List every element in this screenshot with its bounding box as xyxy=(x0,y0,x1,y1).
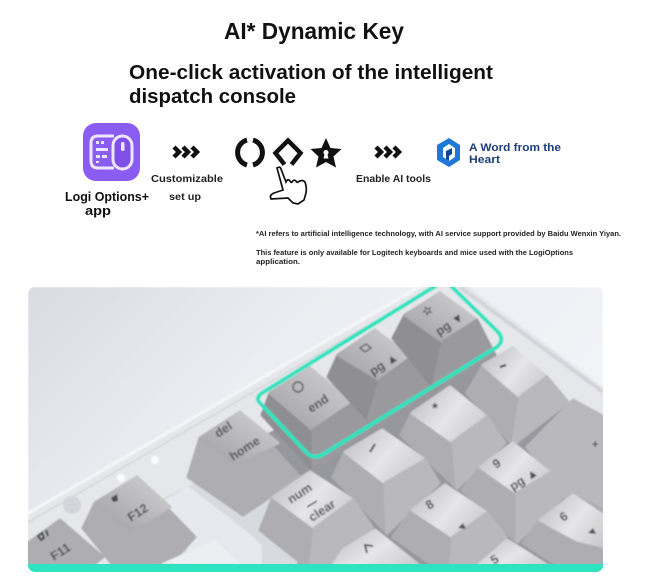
footnote xyxy=(256,231,621,266)
key: num clear: num xyxy=(285,480,315,507)
label: logo wordmark xyxy=(469,142,561,166)
label: Enable AI tools: Enable AI tools xyxy=(356,173,431,185)
icon: diamond key xyxy=(276,140,300,164)
key: minus xyxy=(467,348,568,445)
key: del home: home xyxy=(227,434,263,464)
icon: Logi Options+ app xyxy=(83,123,140,181)
key: 5: 5 xyxy=(488,552,502,568)
key: slash xyxy=(333,430,439,533)
keyboard photo xyxy=(20,275,610,579)
key: F12 xyxy=(83,477,195,570)
key: page down: pg ▼ xyxy=(433,310,467,339)
key: 9 page up xyxy=(462,443,570,542)
highlight: AI key outline xyxy=(258,285,501,457)
key: 5 xyxy=(477,538,550,564)
teal bottom bar xyxy=(28,564,603,572)
subtitle: dispatch console xyxy=(129,86,296,108)
key: num clear: clear xyxy=(306,497,338,525)
key: 9 page up: pg ▲ xyxy=(507,465,541,494)
key: num clear xyxy=(260,472,372,570)
key: 6 xyxy=(522,494,603,564)
footnote: This feature is only available for Logitech keyboards and mice used with the LogiOptions xyxy=(256,250,573,257)
keyboard case xyxy=(28,287,603,564)
footnote: *AI refers to artificial intelligence technology, with AI service support provided by Baidu Wenxin Yiyan. xyxy=(256,231,621,238)
key: plus: + xyxy=(592,439,598,451)
key: page down: ☆ xyxy=(419,302,436,320)
label: Logi Options+ app: Logi Options+ xyxy=(65,190,149,204)
footnote: application. xyxy=(256,259,300,266)
label: logo wordmark: A Word from the xyxy=(469,142,561,154)
key: page up xyxy=(326,328,414,419)
key well shadows xyxy=(164,484,298,564)
icon: blue hexagon xyxy=(437,138,460,167)
subtitle: One-click activation of the intelligent xyxy=(129,62,493,84)
key: 6: 6 xyxy=(557,509,571,525)
key: 8 xyxy=(393,485,506,570)
icon: three AI key symbols with hand xyxy=(238,138,342,204)
key: 9 page up: 9 xyxy=(490,456,504,472)
label: Logi Options+ app xyxy=(65,190,149,218)
icon: circle key xyxy=(238,140,262,165)
label: Logi Options+ app: app xyxy=(85,204,111,218)
logo: A Word from the Heart xyxy=(437,138,561,167)
label: Customizable set up xyxy=(151,173,223,203)
label: logo wordmark: Heart xyxy=(469,154,500,166)
key: F12: F12 xyxy=(125,501,151,525)
key: end: end xyxy=(305,392,331,416)
key: asterisk xyxy=(401,387,505,488)
key: end xyxy=(260,366,350,468)
key: F11 xyxy=(28,520,103,566)
title: AI* Dynamic Key xyxy=(224,18,404,44)
key: lower white xyxy=(160,552,193,564)
key: F11: F11 xyxy=(48,540,73,564)
key: 7 xyxy=(332,528,420,564)
key: page down xyxy=(393,293,495,387)
key: plus xyxy=(525,398,603,508)
key: asterisk: * xyxy=(432,400,438,417)
icon: pointing hand xyxy=(270,167,306,204)
step: Logi Options+ app xyxy=(65,123,149,218)
key: page up: pg ▲ xyxy=(367,350,401,379)
key: del home xyxy=(188,412,300,515)
label: Customizable set up: Customizable xyxy=(151,173,223,185)
arrow: to customizable set up xyxy=(174,147,197,157)
subtitle xyxy=(129,62,493,108)
arrow: to enable AI tools xyxy=(376,147,399,157)
icon: star key xyxy=(310,138,342,168)
key: 8: 8 xyxy=(423,497,437,513)
key: del home: del xyxy=(212,419,235,441)
label: Customizable set up: set up xyxy=(169,191,201,203)
